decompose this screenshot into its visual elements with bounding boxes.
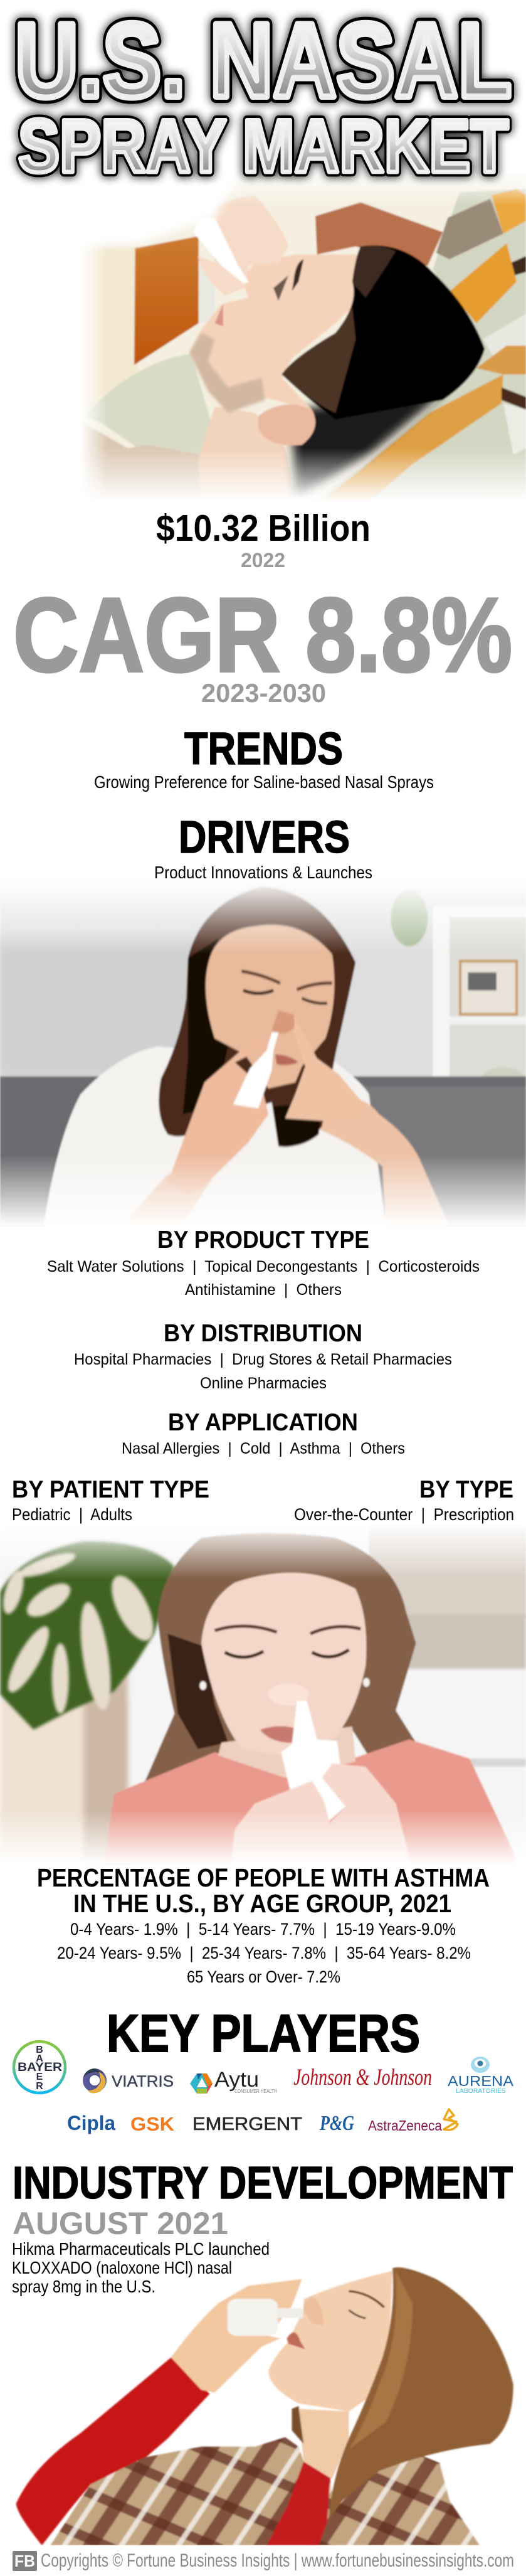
market size: 2022 bbox=[241, 549, 285, 572]
drivers: Product Innovations & Launches bbox=[154, 863, 372, 882]
drivers: DRIVERS bbox=[179, 812, 350, 863]
logo: Aytu: CONSUMER HEALTH bbox=[234, 2089, 277, 2094]
logo: Bayer: E bbox=[36, 2072, 43, 2082]
photo: woman in red sweater using nasal drops bbox=[16, 2267, 513, 2545]
logo: GSK: GSK bbox=[130, 2113, 175, 2135]
heading: key players: KEY PLAYERS bbox=[107, 2004, 420, 2063]
development description: KLOXXADO (naloxone HCl) nasal bbox=[12, 2258, 232, 2277]
segment: by application: BY APPLICATION bbox=[168, 1409, 358, 1436]
footer: copyright: FB bbox=[14, 2552, 35, 2570]
logo: Aytu: Aytu bbox=[214, 2068, 259, 2092]
segment: by product type bbox=[47, 1227, 480, 1299]
CAGR: 2023-2030 bbox=[201, 678, 326, 708]
segment: by patient type bbox=[12, 1476, 209, 1524]
segment: by patient type: BY PATIENT TYPE bbox=[12, 1476, 209, 1503]
segment: by distribution: Online Pharmacies bbox=[200, 1375, 327, 1392]
segment: by distribution: Hospital Pharmacies | Drug Stores & Retail Pharmacies bbox=[74, 1351, 452, 1368]
development date: AUGUST 2021 bbox=[13, 2206, 228, 2241]
logo: Aurena Laboratories: AURENA bbox=[448, 2073, 514, 2089]
heading: percentage of people with asthma: IN THE U.S., BY AGE GROUP, 2021 bbox=[73, 1889, 451, 1918]
logo: P&G: P&G bbox=[319, 2112, 354, 2135]
logo: Viatris: VIATRIS bbox=[112, 2073, 174, 2090]
segment: by type: BY TYPE bbox=[419, 1476, 513, 1503]
age group percentages: 20-24 Years- 9.5% | 25-34 Years- 7.8% | 35-64 Years- 8.2% bbox=[57, 1944, 471, 1962]
age group percentages bbox=[57, 1920, 471, 1986]
trends bbox=[94, 724, 434, 792]
segment: by distribution: BY DISTRIBUTION bbox=[164, 1320, 362, 1347]
segment: by product type: Antihistamine | Others bbox=[185, 1281, 342, 1299]
heading: percentage of people with asthma bbox=[37, 1863, 490, 1918]
segment: by application bbox=[122, 1409, 405, 1457]
market size bbox=[156, 508, 371, 572]
logo: Bayer: A bbox=[36, 2053, 43, 2064]
market size: $10.32 Billion bbox=[156, 508, 371, 549]
trends: TRENDS bbox=[184, 724, 343, 774]
logo: AstraZeneca bbox=[368, 2109, 458, 2134]
title bbox=[15, 1, 512, 188]
segment: by patient type: Pediatric | Adults bbox=[12, 1505, 132, 1524]
photo: woman using nasal spray bbox=[0, 878, 526, 1227]
logo: Aytu bbox=[190, 2068, 277, 2094]
development description: spray 8mg in the U.S. bbox=[12, 2277, 155, 2296]
segment: by distribution bbox=[74, 1320, 452, 1392]
age group percentages: 0-4 Years- 1.9% | 5-14 Years- 7.7% | 15-19 Years-9.0% bbox=[70, 1920, 456, 1939]
logo: Johnson & Johnson: Johnson & Johnson bbox=[293, 2065, 432, 2090]
trends: Growing Preference for Saline-based Nasal Sprays bbox=[94, 772, 434, 792]
logo: Emergent: EMERGENT bbox=[192, 2114, 302, 2134]
age group percentages: 65 Years or Over- 7.2% bbox=[187, 1967, 340, 1986]
segment: by application: Nasal Allergies | Cold | Asthma | Others bbox=[122, 1440, 405, 1457]
segment: by type bbox=[294, 1476, 514, 1524]
logo: Bayer: R bbox=[36, 2081, 43, 2092]
development description bbox=[12, 2239, 270, 2296]
photo: man using nasal drops bbox=[83, 179, 526, 499]
segment: by product type: Salt Water Solutions | Topical Decongestants | Corticosteroids bbox=[47, 1258, 480, 1275]
segment: by product type: BY PRODUCT TYPE bbox=[157, 1227, 369, 1253]
logo: Viatris bbox=[83, 2068, 174, 2094]
photo: girl using nasal spray bbox=[0, 1522, 526, 1864]
logo: Cipla: Cipla bbox=[67, 2112, 115, 2134]
development description: Hikma Pharmaceuticals PLC launched bbox=[12, 2239, 270, 2259]
logo: Aurena Laboratories bbox=[448, 2057, 514, 2095]
logo: AstraZeneca: AstraZeneca bbox=[368, 2117, 442, 2134]
drivers bbox=[154, 812, 372, 882]
logo: Bayer: BAYER bbox=[18, 2061, 62, 2074]
logo: Aurena Laboratories: LABORATORIES bbox=[456, 2088, 506, 2095]
logo: Bayer: B bbox=[36, 2045, 43, 2055]
logo: Bayer bbox=[14, 2041, 65, 2093]
